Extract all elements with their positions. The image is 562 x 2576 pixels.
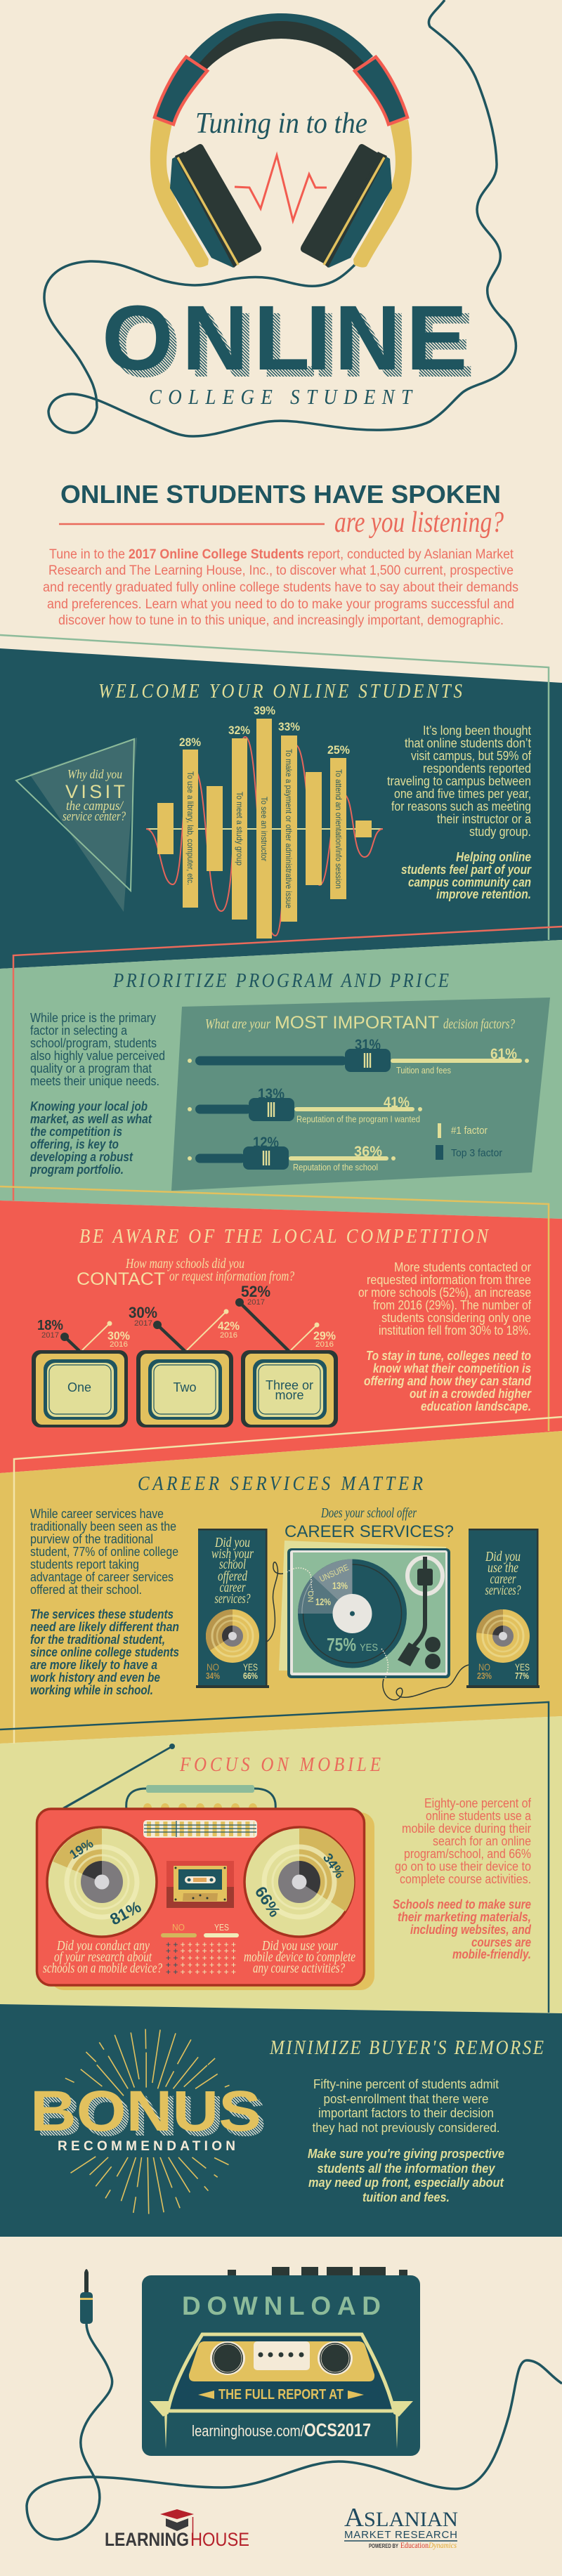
text: welcome: Helping online [456,850,531,864]
tuner [143,1820,257,1838]
callout: visit triangle: the campus/ [66,799,124,813]
tv chart: three or more schools: more [275,1388,304,1402]
bonus wordmark: BONUS [30,2079,261,2143]
intro text: and preferences. Learn what you need to do to make your programs successful and [47,597,514,612]
cassette graphic [150,2334,413,2449]
text: career services: students report taking [30,1557,139,1571]
chart question: contact: or request information from? [169,1269,294,1284]
intro text: and recently graduated fully online college students have to say about their demands [43,580,518,595]
text: competition: out in a crowded higher [410,1387,532,1401]
text: competition: from 2016 (29%). The number of [373,1298,532,1312]
tv chart: one school: 30% [107,1329,130,1342]
text: welcome: visit campus, but 59% of [411,749,532,763]
chart question: career services: Does your school offer [320,1505,417,1521]
text: bonus: important factors to their decision [318,2106,494,2120]
right speaker: used career services: career [490,1571,516,1587]
right speaker: used career services: Did you [485,1549,521,1564]
left speaker: research on mobile [47,1827,157,1937]
text: prioritize: also highly value perceived [30,1049,165,1063]
text: welcome: one and five times per year, [394,787,531,801]
heading: welcome: WELCOME YOUR ONLINE STUDENTS [98,679,462,702]
callout: visit triangle: VISIT [65,781,125,802]
text: prioritize: meets their unique needs. [30,1074,159,1088]
record player pie chart: 13% [332,1580,348,1591]
text: mobile: search for an online [433,1834,531,1848]
panel: decision factors chart [171,998,550,1191]
text: prioritize: quality or a program that [30,1061,152,1075]
left speaker: wish career services: school [219,1557,246,1572]
text: prioritize: the competition is [30,1125,122,1139]
cassette [166,1861,234,1908]
tv chart: two schools: 2017 [134,1319,152,1328]
chart question: career services [285,1505,454,1541]
right speaker: coursework on mobile [244,1827,354,1937]
caption: left question: Did you conduct any [56,1938,150,1954]
bonus badge [30,2029,266,2214]
text: competition: or more schools (52%), an increase [358,1286,531,1300]
slider: tuition and fees: Tuition and fees [396,1065,451,1075]
bar labels: To make a payment or other administrative issue [284,749,294,908]
bar labels: To attend an orientation/info session [334,769,344,889]
record player pie chart: 12% [315,1596,331,1607]
tv chart: one school: 2017 [41,1331,59,1340]
slider: reputation of the school: 36% [354,1144,382,1160]
text: welcome: students feel part of your [401,863,532,877]
left speaker: wish career services: NO [207,1661,219,1673]
left speaker: wish career services: 66% [243,1671,258,1681]
heading: prioritize: PRIORITIZE PROGRAM AND PRICE [112,969,449,991]
jack plug [80,2269,93,2324]
left speaker: wish career services: career [219,1580,246,1595]
text: bonus: students all the information they [318,2162,495,2176]
download device [142,2267,420,2456]
tv chart: two schools: 42% [218,1319,240,1333]
slider: reputation of the school: 12% [253,1135,279,1151]
headband [189,13,373,70]
text: mobile: including websites, and [410,1923,532,1937]
left speaker: wish career services: Did you [214,1535,250,1550]
text: mobile: online students use a [426,1809,532,1823]
left speaker: research on mobile: 81% [107,1897,144,1928]
bar labels: To see an instructor [259,797,269,861]
logo: learning house: LEARNING [105,2529,189,2550]
text: prioritize: Knowing your local job [30,1099,148,1113]
text: bonus: tuition and fees. [362,2190,450,2204]
slider: reputation of the program: Reputation of the program I wanted [296,1114,420,1124]
text: mobile: mobile device during their [402,1822,531,1836]
text: prioritize: market, as well as what [30,1112,152,1126]
device buttons [228,2267,407,2276]
caption: right question [244,1938,355,1976]
tv chart: one school: 2016 [110,1340,128,1349]
sound pulse [235,155,327,221]
tv chart: three or more schools [235,1283,338,1427]
tv chart: two schools: 30% [129,1304,157,1321]
tonearm [398,1557,443,1669]
slider: tuition and fees: 31% [355,1037,381,1053]
intro text: discover how to tune in to this unique, and increasingly important, demographic. [58,613,504,628]
title: college student: COLLEGE STUDENT [149,385,413,409]
intro heading: ONLINE STUDENTS HAVE SPOKEN [60,480,501,509]
text: mobile: go on to use their device to [395,1859,531,1874]
logo: aslanian market research: POWERED BY [369,2543,399,2549]
title: online: ONLINE [102,286,467,389]
logo: aslanian market research: Dynamics [428,2540,457,2550]
panel: competition background [0,1201,562,1473]
text: mobile: their marketing materials, [398,1910,531,1924]
text: welcome: It’s long been thought [423,724,531,738]
text: competition: education landscape. [421,1399,531,1413]
percentages: 33% [278,720,300,733]
left speaker: wish career services: services? [215,1591,250,1607]
text: career services: work history and even be [30,1671,160,1685]
text: mobile [393,1796,532,1961]
speaker grille: + + + + + + + + + + [166,1940,236,1949]
audio cable with jack [27,2269,562,2539]
callout: visit triangle: Why did you [67,767,122,781]
left speaker: wish career services [196,1529,269,1688]
tv chart: two schools: Two [173,1380,197,1394]
percentages [179,704,350,757]
slider: reputation of the school: Reputation of the school [293,1162,378,1172]
text: bonus: may need up front, especially about [308,2176,504,2190]
sound wave [146,737,383,936]
text: career services: offered at their school. [30,1583,142,1597]
left speaker: wish career services: 34% [206,1671,220,1681]
text: welcome: that online students don’t [405,736,531,750]
antenna [63,1744,175,1808]
chart question: career services: CAREER SERVICES? [285,1522,454,1541]
callout: visit triangle: service center? [63,809,126,824]
tv chart: two schools: 2016 [220,1331,237,1340]
text: mobile: courses are [471,1935,531,1949]
text: mobile: program/school, and 66% [404,1847,531,1861]
title: online: ONLINE [109,293,474,396]
right speaker: used career services: services? [485,1583,521,1598]
legend: no and yes: NO [172,1922,185,1933]
text: prioritize: developing a robust [30,1150,133,1164]
intro text: Research and The Learning House, Inc., to discover what 1,500 current, prospective [48,563,514,578]
text: career services [30,1507,179,1697]
tv chart: two schools [129,1304,240,1427]
speaker grille: + + + + + + + + + + [166,1953,236,1963]
report url: learninghouse.com/OCS2017 [192,2419,371,2440]
tv chart: one school: One [67,1380,91,1394]
left speaker: research on mobile: 19% [67,1836,96,1862]
tv chart: three or more schools: 2016 [315,1340,334,1349]
text: career services: for the traditional student, [30,1633,165,1647]
percentages: 39% [254,704,275,717]
speaker grille: + + + + + + + + + + [166,1946,236,1956]
text: career services: are more likely to have a [30,1658,157,1672]
text: competition: know what their competition is [373,1361,531,1375]
text: career services: student, 77% of online college [30,1545,178,1559]
logo: aslanian market research: MARKET RESEARCH [344,2529,457,2541]
panel: mobile background [0,1716,562,2013]
left arm [150,57,209,268]
chart title: decision factors? [443,1016,515,1032]
text: bonus: they had not previously considered. [312,2121,500,2135]
speaker grille: + + + + + + + + + + [166,1967,236,1977]
tv chart: three or more schools: 2017 [247,1298,265,1307]
percentages: 25% [327,743,350,757]
chart title: MOST IMPORTANT [275,1013,439,1033]
logo: aslanian market research: Education [400,2540,429,2550]
right speaker: coursework on mobile: 34% [320,1851,347,1881]
caption: right question: mobile device to complete [244,1949,355,1965]
logo: learning house [105,2509,249,2550]
text: career services: The services these students [30,1607,174,1621]
right ear cup [301,144,392,268]
text: career services: since online college students [30,1645,179,1659]
caption: left question: of your research about [54,1949,152,1965]
text: bonus: Fifty-nine percent of students admit [313,2077,499,2091]
legend [436,1123,502,1160]
text: welcome: improve retention. [436,887,531,901]
heading: competition: BE AWARE OF THE LOCAL COMPETITION [79,1224,490,1247]
text: career services: While career services have [30,1507,164,1521]
text: career services: purview of the traditional [30,1532,153,1546]
text: bonus: Make sure you're giving prospective [308,2147,504,2161]
left speaker: wish career services: wish your [211,1546,254,1562]
text: prioritize: factor in selecting a [30,1024,128,1038]
text: career services: working while in school. [30,1683,153,1697]
record player pie chart: 75% [327,1634,356,1655]
panel: career background [0,1431,562,1744]
right speaker: used career services [466,1529,540,1688]
text: competition: More students contacted or [394,1260,531,1274]
slider: tuition and fees [188,1037,529,1075]
text: mobile: complete course activities. [400,1872,531,1886]
chart question: contact [77,1256,294,1289]
text: competition: students considering only one [381,1311,531,1325]
handle [126,1785,275,1813]
text: welcome: study group. [469,825,531,839]
slider: reputation of the program: 41% [384,1094,410,1111]
chart question: contact: CONTACT [77,1269,165,1289]
tv chart: three or more schools: 29% [313,1329,336,1342]
slider: reputation of the program [188,1086,422,1124]
percentages: 32% [228,724,250,737]
bar labels [185,749,344,908]
text: career services: advantage of career services [30,1570,174,1584]
right speaker: used career services: NO [478,1661,490,1673]
panel: bonus background [0,2004,562,2237]
text: welcome: campus community can [408,875,531,889]
bar labels: To meet a study group [235,792,244,865]
platter [298,1560,407,1668]
right speaker: used career services: use the [488,1560,518,1576]
boombox chart [37,1744,374,1990]
recommendation label: RECOMMENDATION [58,2139,235,2154]
intro text: Tune in to the 2017 Online College Students report, conducted by Aslanian Market [49,547,514,562]
panel: prioritize background [0,940,562,1219]
slider: reputation of the school [188,1135,396,1172]
text: prioritize: program portfolio. [30,1163,124,1177]
text: career services: need are likely different than [30,1620,179,1634]
left ear cup [170,144,261,268]
text: welcome: traveling to campus between [387,774,531,788]
text: prioritize: offering, is key to [30,1137,119,1151]
caption: right question: any course activities? [253,1961,345,1976]
text: competition: requested information from three [367,1273,531,1287]
chart title [205,1013,515,1033]
legend: Top 3 factor [451,1147,502,1159]
slider: reputation of the program: 13% [258,1086,285,1102]
tv chart: one school: 18% [37,1318,63,1333]
tv chart: three or more schools: Three or [266,1378,313,1392]
logo: learning house: HOUSE [190,2529,249,2550]
text: competition: To stay in tune, colleges need to [366,1349,531,1363]
text: mobile: mobile-friendly. [452,1947,531,1961]
heading: focus on mobile: FOCUS ON MOBILE [179,1753,381,1775]
chart title: What are your [205,1016,270,1032]
headphones icon [150,13,412,268]
chart question: contact: How many schools did you [125,1256,244,1271]
tv chart: one school [32,1318,130,1427]
logo: aslanian market research [344,2503,458,2550]
legend: #1 factor [451,1125,488,1137]
turntable wires [267,1562,469,1700]
right speaker: used career services: YES [515,1661,530,1673]
logo: aslanian market research: ASLANIAN [344,2503,458,2532]
record player pie chart: NO [307,1590,315,1602]
text: prioritize [30,1011,165,1177]
right arm [353,57,412,268]
text: career services: traditionally been seen as the [30,1519,176,1534]
text: welcome [387,724,532,901]
speaker grille: + + + + + + + + + + [166,1960,236,1970]
intro text [43,547,518,628]
text: competition: offering and how they can stand [364,1374,532,1388]
text: mobile: Eighty-one percent of [424,1796,532,1810]
full report label: THE FULL REPORT AT [218,2387,344,2402]
right speaker: used career services: 77% [515,1671,529,1681]
left speaker: wish career services: offered [218,1569,248,1584]
text: prioritize: While price is the primary [30,1011,156,1025]
text: welcome: for reasons such as meeting [391,799,531,813]
pie labels: UNSURE [318,1562,350,1584]
title: tuning in to the: Tuning in to the [195,107,367,140]
right speaker: used career services: 23% [477,1671,492,1681]
speaker grille [166,1940,236,1977]
legend: no and yes: YES [214,1922,229,1933]
panel: welcome background [0,648,562,969]
caption: left question: schools on a mobile device? [43,1961,162,1976]
text: bonus: post-enrollment that there were [323,2092,489,2106]
text: mobile: Schools need to make sure [393,1897,531,1911]
text: competition [358,1260,532,1413]
right speaker: coursework on mobile: 66% [251,1883,285,1920]
heading: career services: CAREER SERVICES MATTER [138,1472,423,1494]
text: bonus [308,2077,504,2204]
bonus wordmark: BONUS [36,2084,266,2148]
caption: left question [43,1938,162,1976]
text: welcome: respondents reported [423,761,531,776]
text: prioritize: school/program, students [30,1036,157,1050]
download heading: DOWNLOAD [182,2291,381,2320]
record player pie chart: YES [360,1642,378,1654]
bar chart: why visit campus [146,704,383,939]
heading: minimize buyer's remorse: MINIMIZE BUYER'S REMORSE [269,2036,544,2058]
record player pie chart [279,1541,450,1679]
text: competition: institution fell from 30% to 18%. [379,1323,531,1338]
subheading: are you listening: are you listening? [334,506,504,539]
percentages: 28% [179,735,201,749]
left speaker: wish career services: YES [243,1661,258,1673]
tv chart: three or more schools: 52% [241,1283,270,1300]
bar labels: To use a library, lab, computer, etc. [185,771,195,885]
legend: no and yes [161,1922,239,1937]
sunburst [65,2029,230,2214]
slider: tuition and fees: 61% [490,1046,517,1062]
text: welcome: their instructor or a [437,812,532,826]
headphone cable [44,0,516,436]
callout: visit triangle [16,738,137,912]
caption: right question: Did you use your [261,1938,338,1954]
bars [157,719,372,939]
